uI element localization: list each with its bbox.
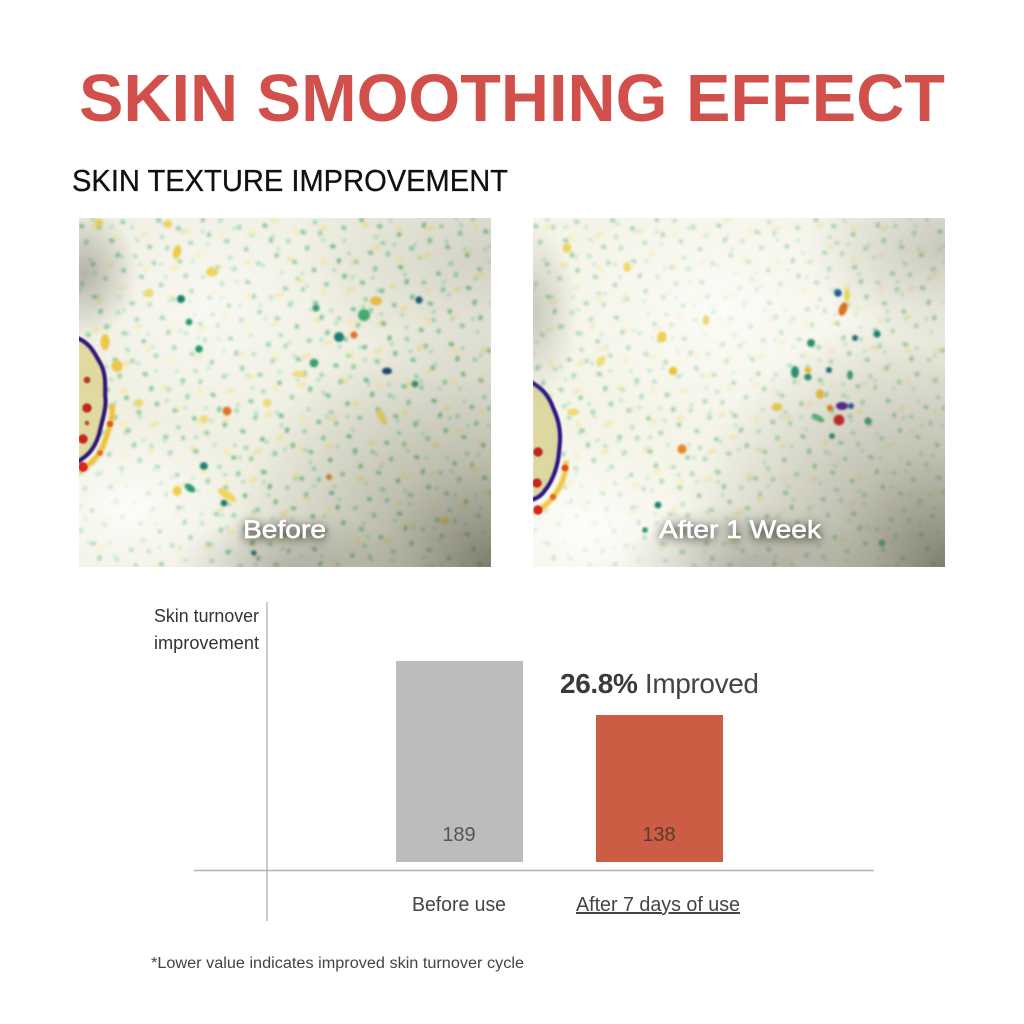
panel: after photo <box>533 218 945 567</box>
x label: after 7 days of use: After 7 days of use <box>576 894 740 916</box>
section heading: SKIN TEXTURE IMPROVEMENT <box>72 163 508 198</box>
callout: improvement: 26.8% Improved <box>560 668 759 699</box>
x label: before use: Before use <box>412 894 506 916</box>
chart axes <box>194 602 874 921</box>
bar: before use <box>396 661 523 862</box>
bar: after 7 days: 138 <box>642 824 676 846</box>
bar: before use: 189 <box>442 824 476 846</box>
axis label: Skin turnover <box>154 606 259 626</box>
title: SKIN SMOOTHING EFFECT <box>79 61 945 136</box>
axis label: improvement <box>154 633 259 653</box>
footnote: *Lower value indicates improved skin turnover cycle <box>151 955 524 972</box>
bar: after 7 days <box>596 715 723 862</box>
panel: before photo <box>79 218 491 567</box>
label: before: Before <box>243 516 326 544</box>
icon: crescent mark <box>77 338 113 472</box>
bar chart <box>154 602 874 921</box>
label: after 1 week: After 1 Week <box>659 516 822 544</box>
icon: crescent mark <box>531 382 569 515</box>
